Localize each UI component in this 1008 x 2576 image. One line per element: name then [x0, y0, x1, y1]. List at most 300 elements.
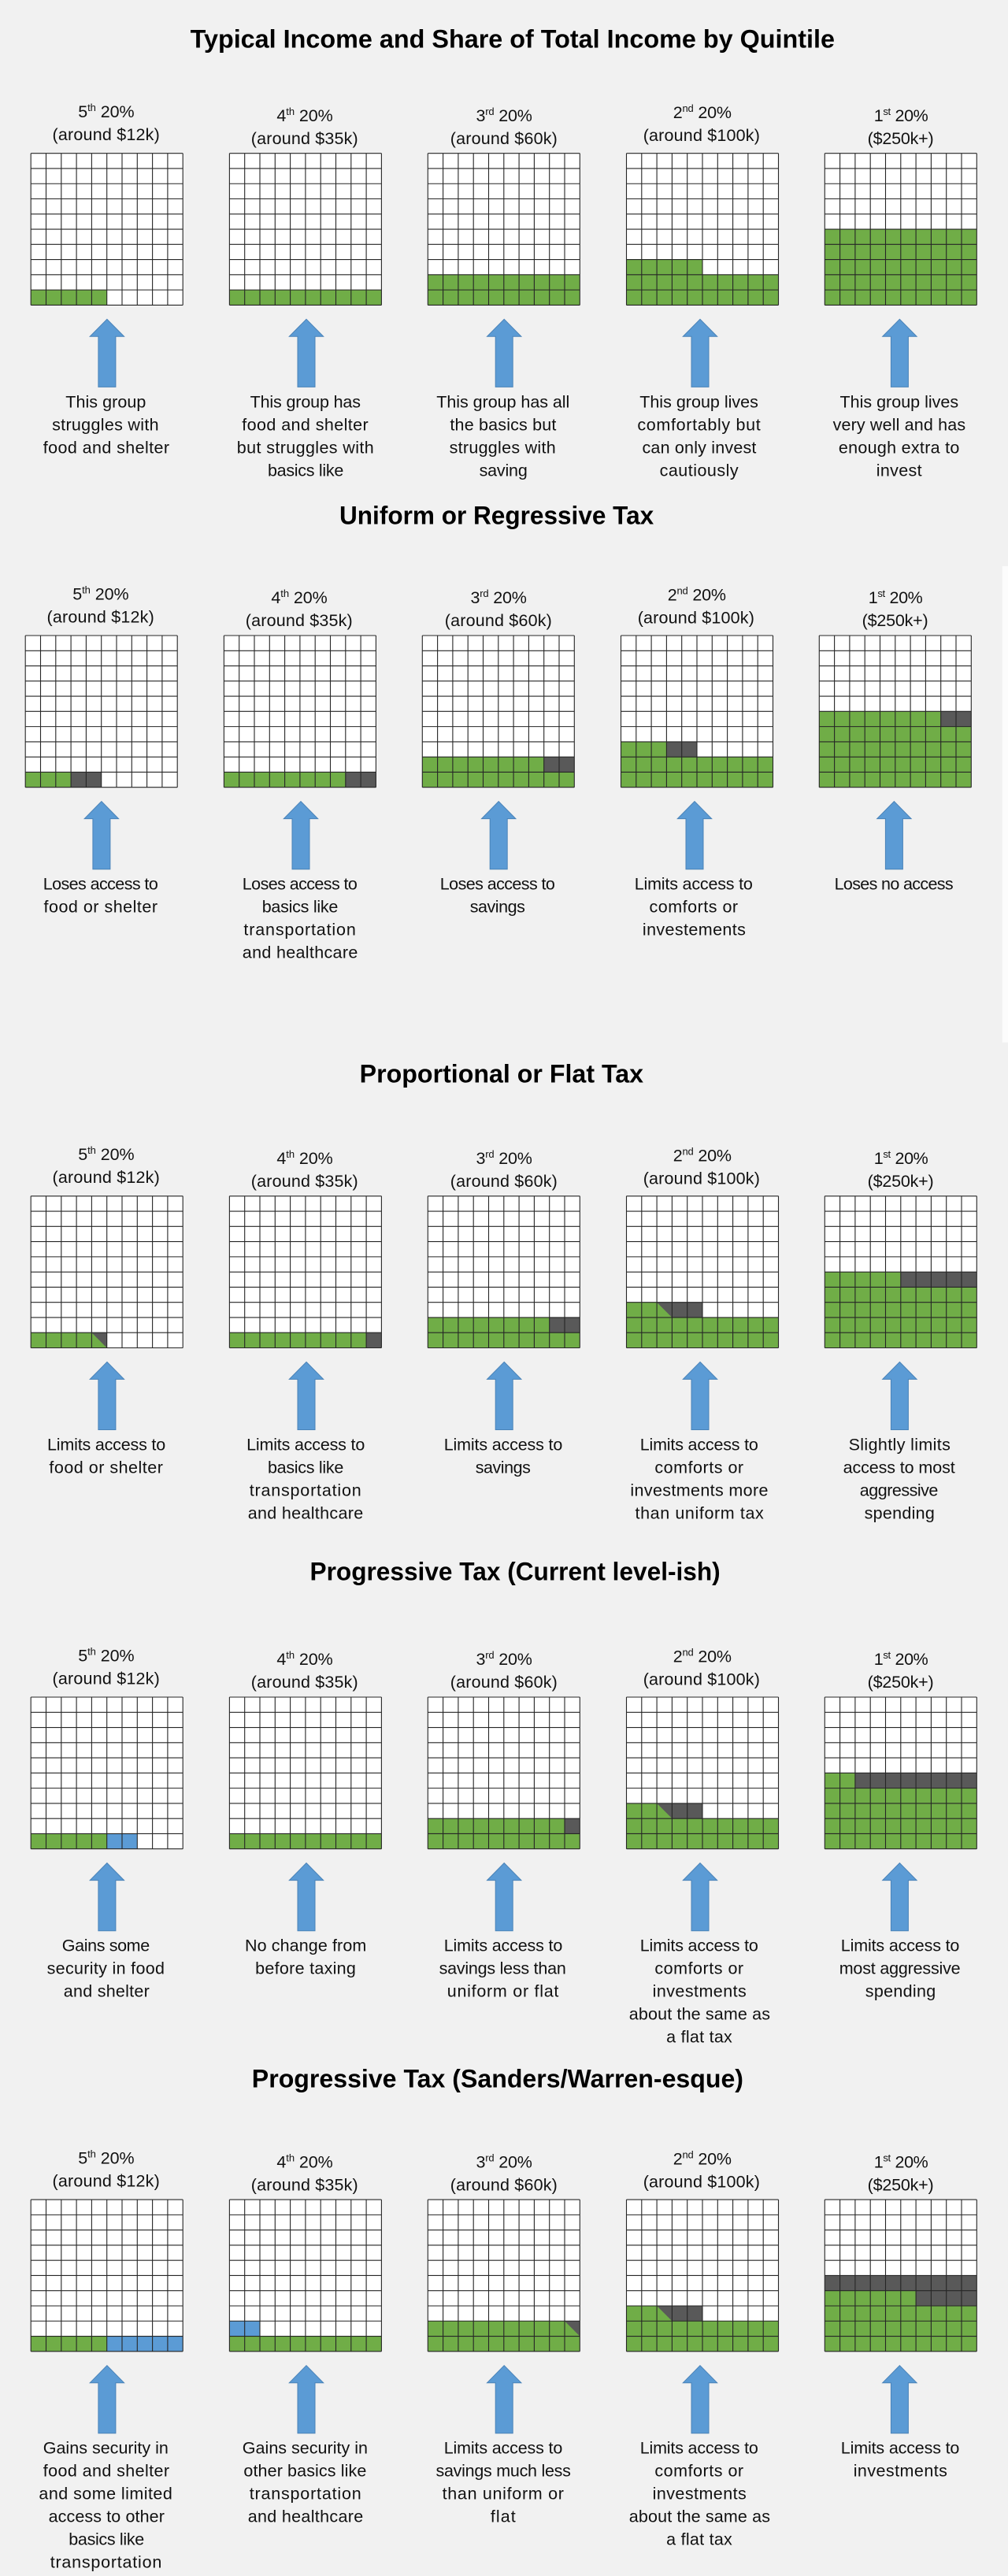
- arrow: [482, 802, 516, 869]
- text block: transportation: [50, 2553, 161, 2572]
- heading: nd: [682, 102, 694, 114]
- text block: [243, 2439, 368, 2526]
- panel: 3rd 20%: [428, 1649, 580, 2001]
- text block: Gains some: [62, 1937, 150, 1955]
- text block: Loses no access: [835, 875, 954, 894]
- text block: most aggressive: [839, 1959, 961, 1978]
- text block: [436, 392, 569, 480]
- heading: [638, 584, 754, 627]
- heading: [450, 106, 558, 148]
- heading: 20%: [494, 1149, 532, 1168]
- arrow: [90, 1362, 124, 1430]
- text block: Gains security in: [43, 2439, 169, 2458]
- panel: 1st 20%: [825, 106, 976, 480]
- heading: nd: [682, 1145, 694, 1157]
- text block: than uniform or: [443, 2485, 564, 2504]
- heading: 5: [78, 1646, 87, 1665]
- grid chart: [428, 2200, 580, 2352]
- text block: food and shelter: [242, 415, 369, 434]
- panel: 3rd 20%: [428, 106, 580, 480]
- grid chart: [31, 1697, 183, 1849]
- panel: 3rd 20%: [428, 2152, 580, 2526]
- grid chart: [627, 1697, 778, 1849]
- text block: spending: [865, 1503, 935, 1522]
- heading: (around $35k): [251, 129, 358, 148]
- text block: [43, 875, 158, 917]
- heading: (around $12k): [52, 2171, 160, 2190]
- heading: th: [280, 587, 289, 599]
- text block: struggles with: [450, 438, 556, 457]
- text block: Limits access to: [841, 1937, 959, 1955]
- arrow: [883, 1362, 917, 1430]
- arrow: [289, 319, 324, 387]
- arrow: [90, 1863, 124, 1931]
- heading: rd: [480, 587, 489, 599]
- arrow: [487, 2366, 521, 2433]
- text block: [246, 1435, 365, 1522]
- heading: [643, 1646, 760, 1688]
- heading: 20%: [891, 106, 928, 125]
- grid chart: [31, 2200, 183, 2352]
- title: Progressive Tax (Current level-ish): [310, 1558, 721, 1586]
- heading: rd: [485, 1649, 495, 1661]
- heading: 20%: [694, 1146, 732, 1165]
- heading: (around $60k): [450, 129, 558, 148]
- arrow: [487, 319, 521, 387]
- heading: (around $60k): [450, 1673, 558, 1692]
- heading: 20%: [885, 588, 923, 607]
- heading: 20%: [96, 1145, 135, 1164]
- heading: (around $60k): [450, 2175, 558, 2194]
- charts row: [25, 584, 971, 962]
- text block: transportation: [250, 1481, 361, 1499]
- grid chart: [627, 1196, 778, 1348]
- heading: [868, 1649, 934, 1692]
- panel: 4th 20%: [229, 2152, 381, 2526]
- text block: Limits access to: [444, 1937, 562, 1955]
- grid chart: [229, 154, 381, 305]
- heading: 20%: [891, 1650, 928, 1669]
- heading: (around $60k): [445, 611, 552, 630]
- arrow: [90, 319, 124, 387]
- arrow: [883, 2366, 917, 2433]
- heading: [643, 102, 760, 145]
- heading: 1: [874, 1650, 884, 1669]
- text block: Limits access to: [841, 2439, 959, 2458]
- panel: 4th 20%: [229, 1148, 381, 1522]
- text block: about the same as: [629, 2005, 770, 2024]
- heading: th: [286, 1148, 295, 1160]
- heading: [450, 1148, 558, 1191]
- text block: very well and has: [833, 415, 965, 434]
- text block: Limits access to: [640, 1937, 758, 1955]
- heading: ($250k+): [862, 611, 928, 630]
- heading: [52, 1144, 160, 1187]
- heading: th: [82, 584, 91, 595]
- grid chart: [825, 1697, 976, 1849]
- panel: 1st 20%: [825, 2152, 976, 2481]
- text block: uniform or flat: [447, 1982, 558, 2001]
- charts row: [31, 1144, 976, 1522]
- heading: 20%: [494, 2152, 532, 2171]
- heading: 20%: [694, 103, 732, 122]
- arrow: [289, 1362, 324, 1430]
- heading: 20%: [295, 1149, 333, 1168]
- arrow: [877, 802, 911, 869]
- heading: 20%: [96, 102, 135, 121]
- heading: (around $12k): [47, 607, 154, 626]
- heading: 2: [673, 103, 683, 122]
- heading: (around $12k): [52, 1669, 160, 1688]
- text block: transportation: [250, 2485, 361, 2504]
- heading: [862, 587, 928, 630]
- text block: enough extra to: [839, 438, 959, 457]
- charts row: [31, 102, 976, 480]
- panel: 3rd 20%: [422, 587, 574, 917]
- section: progressive tax sanders/warren-esque: [31, 2065, 976, 2572]
- panel: 2nd 20%: [627, 1145, 778, 1522]
- heading: [868, 2152, 934, 2194]
- heading: [52, 2148, 160, 2190]
- heading: [47, 584, 154, 626]
- text block: than uniform tax: [635, 1503, 764, 1522]
- panel: 4th 20%: [229, 1649, 381, 1978]
- title: Progressive Tax (Sanders/Warren-esque): [252, 2065, 743, 2093]
- heading: 5: [72, 584, 82, 603]
- text block: security in food: [47, 1959, 165, 1978]
- grid chart: [621, 636, 773, 788]
- text block: food or shelter: [49, 1458, 163, 1477]
- arrow: [90, 2366, 124, 2433]
- heading: [450, 2152, 558, 2194]
- heading: [246, 587, 353, 630]
- arrow: [683, 1362, 717, 1430]
- text block: but struggles with: [237, 438, 374, 457]
- heading: 2: [673, 2150, 683, 2169]
- text block: Gains security in: [243, 2439, 368, 2458]
- text block: Loses access to: [440, 875, 555, 894]
- text block: investments: [653, 1982, 747, 2001]
- text block: cautiously: [660, 461, 739, 480]
- heading: th: [286, 2152, 295, 2163]
- grid chart: [819, 636, 971, 788]
- arrow: [683, 319, 717, 387]
- grid chart: [31, 154, 183, 305]
- heading: 20%: [96, 2148, 135, 2167]
- heading: 20%: [295, 1650, 333, 1669]
- text block: Limits access to: [246, 1435, 365, 1454]
- heading: (around $35k): [246, 611, 353, 630]
- text block: [436, 2439, 571, 2526]
- grid chart: [428, 1196, 580, 1348]
- heading: th: [87, 102, 96, 113]
- text block: and shelter: [64, 1982, 150, 2001]
- text block: flat: [491, 2507, 516, 2526]
- text block: comforts or: [654, 1458, 743, 1477]
- heading: [251, 2152, 358, 2194]
- panel: 2nd 20%: [627, 1646, 778, 2047]
- heading: rd: [485, 2152, 495, 2163]
- text block: comforts or: [654, 1959, 743, 1978]
- section: typical income and share by quintile: [31, 24, 976, 480]
- text block: comfortably but: [637, 415, 761, 434]
- text block: invest: [876, 461, 922, 480]
- heading: [251, 106, 358, 148]
- heading: (around $100k): [643, 1670, 760, 1689]
- heading: 20%: [694, 1648, 732, 1666]
- text block: comforts or: [654, 2462, 743, 2481]
- heading: [643, 1145, 760, 1188]
- heading: 5: [78, 102, 87, 121]
- grid chart: [31, 1196, 183, 1348]
- arrow: [284, 802, 318, 869]
- text block: [43, 392, 169, 457]
- text block: savings much less: [436, 2462, 571, 2481]
- arrow: [289, 2366, 324, 2433]
- text block: savings: [470, 898, 525, 917]
- panel: 5th 20%: [31, 1645, 183, 2001]
- heading: th: [87, 1645, 96, 1657]
- arrow: [289, 1863, 324, 1931]
- heading: [52, 1645, 160, 1688]
- arrow: [883, 1863, 917, 1931]
- text block: [635, 875, 753, 940]
- panel: 2nd 20%: [627, 2149, 778, 2549]
- panel: 1st 20%: [819, 587, 971, 894]
- heading: st: [883, 1148, 891, 1160]
- heading: [643, 2149, 760, 2192]
- grid chart: [627, 2200, 778, 2352]
- heading: 4: [276, 1650, 286, 1669]
- text block: Loses access to: [243, 875, 358, 894]
- text block: [440, 875, 555, 917]
- arrow: [487, 1863, 521, 1931]
- heading: 3: [476, 2152, 485, 2171]
- charts row: [31, 1645, 976, 2047]
- heading: [52, 102, 160, 144]
- section: progressive tax current level-ish: [31, 1558, 976, 2047]
- text block: Limits access to: [635, 875, 753, 894]
- heading: th: [87, 1144, 96, 1156]
- text block: [47, 1435, 165, 1477]
- heading: 20%: [494, 1650, 532, 1669]
- heading: 4: [276, 1149, 286, 1168]
- panel: 5th 20%: [25, 584, 177, 917]
- text block: This group lives: [839, 392, 958, 411]
- heading: 5: [78, 1145, 87, 1164]
- text block: [843, 1435, 955, 1522]
- heading: 3: [471, 588, 480, 607]
- text block: [833, 392, 965, 480]
- heading: 1: [874, 1149, 884, 1168]
- text block: investments: [653, 2485, 747, 2504]
- heading: st: [883, 1649, 891, 1661]
- heading: ($250k+): [868, 129, 934, 148]
- heading: 20%: [295, 106, 333, 125]
- text block: Limits access to: [640, 2439, 758, 2458]
- grid chart: [825, 154, 976, 305]
- heading: 2: [673, 1146, 683, 1165]
- text block: food and shelter: [43, 438, 169, 457]
- panel: 4th 20%: [224, 587, 376, 962]
- grid chart: [229, 2200, 381, 2352]
- panel: 1st 20%: [825, 1649, 976, 2001]
- text block: and healthcare: [243, 943, 358, 962]
- heading: (around $35k): [251, 2175, 358, 2194]
- heading: [450, 1649, 558, 1692]
- title: Uniform or Regressive Tax: [339, 502, 654, 530]
- heading: 1: [874, 106, 884, 125]
- heading: (around $35k): [251, 1172, 358, 1191]
- heading: (around $100k): [643, 2173, 760, 2192]
- arrow: [677, 802, 712, 869]
- panel: 3rd 20%: [428, 1148, 580, 1477]
- text block: investments: [854, 2462, 947, 2481]
- text block: about the same as: [629, 2507, 770, 2526]
- heading: 2: [668, 586, 677, 605]
- heading: 20%: [289, 588, 328, 607]
- arrow: [487, 1362, 521, 1430]
- section: uniform or regressive tax: [25, 502, 971, 962]
- text block: before taxing: [255, 1959, 356, 1978]
- heading: 20%: [91, 584, 129, 603]
- text block: investments more: [630, 1481, 769, 1499]
- heading: 4: [271, 588, 280, 607]
- text block: Limits access to: [444, 1435, 562, 1454]
- arrow: [683, 1863, 717, 1931]
- arrow: [883, 319, 917, 387]
- heading: nd: [682, 1647, 694, 1659]
- arrow: [84, 802, 119, 869]
- section: proportional or flat tax: [31, 1060, 976, 1522]
- text block: the basics but: [450, 415, 556, 434]
- heading: th: [87, 2148, 96, 2159]
- grid chart: [25, 636, 177, 788]
- heading: ($250k+): [868, 1673, 934, 1692]
- heading: 4: [276, 106, 286, 125]
- heading: [868, 1148, 934, 1191]
- heading: (around $100k): [638, 608, 754, 627]
- grid chart: [422, 636, 574, 788]
- heading: 4: [276, 2152, 286, 2171]
- heading: [445, 587, 552, 630]
- heading: ($250k+): [868, 1172, 934, 1191]
- heading: 20%: [688, 585, 726, 604]
- heading: [868, 106, 934, 148]
- heading: (around $60k): [450, 1172, 558, 1191]
- text block: [243, 875, 358, 962]
- panel: 2nd 20%: [627, 102, 778, 480]
- heading: st: [877, 587, 886, 599]
- text block: [629, 2439, 770, 2549]
- text block: [839, 1937, 961, 2001]
- text block: Limits access to: [640, 1435, 758, 1454]
- text block: This group has all: [436, 392, 569, 411]
- heading: 1: [874, 2152, 884, 2171]
- text block: transportation: [243, 921, 356, 940]
- grid chart: [825, 1196, 976, 1348]
- text block: Limits access to: [444, 2439, 562, 2458]
- grid chart: [825, 2200, 976, 2352]
- text block: [629, 1937, 770, 2047]
- heading: 3: [476, 1650, 485, 1669]
- heading: [251, 1148, 358, 1191]
- text block: access to other: [49, 2507, 165, 2526]
- panel: 5th 20%: [31, 2148, 183, 2572]
- text block: [245, 1937, 366, 1978]
- text block: Loses access to: [43, 875, 158, 894]
- heading: (around $100k): [643, 1169, 760, 1188]
- text block: access to most: [843, 1458, 955, 1477]
- heading: 20%: [96, 1646, 135, 1665]
- text block: This group lives: [639, 392, 758, 411]
- heading: ($250k+): [868, 2175, 934, 2194]
- text block: [47, 1937, 165, 2001]
- grid chart: [229, 1697, 381, 1849]
- heading: (around $100k): [643, 126, 760, 145]
- heading: (around $12k): [52, 125, 160, 144]
- grid chart: [229, 1196, 381, 1348]
- charts row: [31, 2148, 976, 2572]
- grid chart: [428, 1697, 580, 1849]
- heading: 3: [476, 1149, 485, 1168]
- heading: 20%: [694, 2150, 732, 2169]
- title: Proportional or Flat Tax: [360, 1060, 643, 1088]
- text block: other basics like: [243, 2462, 366, 2481]
- title: Typical Income and Share of Total Income by Quintile: [191, 24, 835, 53]
- text block: [444, 1435, 562, 1477]
- heading: rd: [485, 106, 495, 117]
- text block: struggles with: [52, 415, 159, 434]
- text block: investements: [643, 921, 746, 940]
- heading: st: [883, 106, 891, 117]
- heading: th: [286, 1649, 295, 1661]
- text block: can only invest: [643, 438, 756, 457]
- arrow: [683, 2366, 717, 2433]
- heading: 20%: [295, 2152, 333, 2171]
- text block: savings: [476, 1458, 531, 1477]
- grid chart: [627, 154, 778, 305]
- grid chart: [224, 636, 376, 788]
- text block: basics like: [268, 461, 343, 480]
- heading: nd: [676, 584, 688, 596]
- text block: a flat tax: [666, 2530, 732, 2549]
- heading: 1: [869, 588, 878, 607]
- text block: [39, 2439, 172, 2572]
- text block: a flat tax: [666, 2028, 732, 2047]
- heading: 20%: [488, 588, 527, 607]
- text block: basics like: [69, 2530, 144, 2549]
- text block: savings less than: [439, 1959, 566, 1978]
- text block: [841, 2439, 959, 2481]
- heading: rd: [485, 1148, 495, 1160]
- heading: nd: [682, 2149, 694, 2161]
- grid chart: [428, 154, 580, 305]
- text block: and healthcare: [248, 2507, 363, 2526]
- text block: food or shelter: [44, 898, 158, 917]
- text block: This group has: [250, 392, 361, 411]
- panel: 5th 20%: [31, 102, 183, 457]
- panel: 1st 20%: [825, 1148, 976, 1522]
- text block: food and shelter: [43, 2462, 169, 2481]
- heading: st: [883, 2152, 891, 2163]
- heading: (around $35k): [251, 1673, 358, 1692]
- text block: saving: [480, 461, 528, 480]
- text block: No change from: [245, 1937, 366, 1955]
- text block: [630, 1435, 769, 1522]
- heading: 20%: [891, 1149, 928, 1168]
- panel: 4th 20%: [229, 106, 381, 480]
